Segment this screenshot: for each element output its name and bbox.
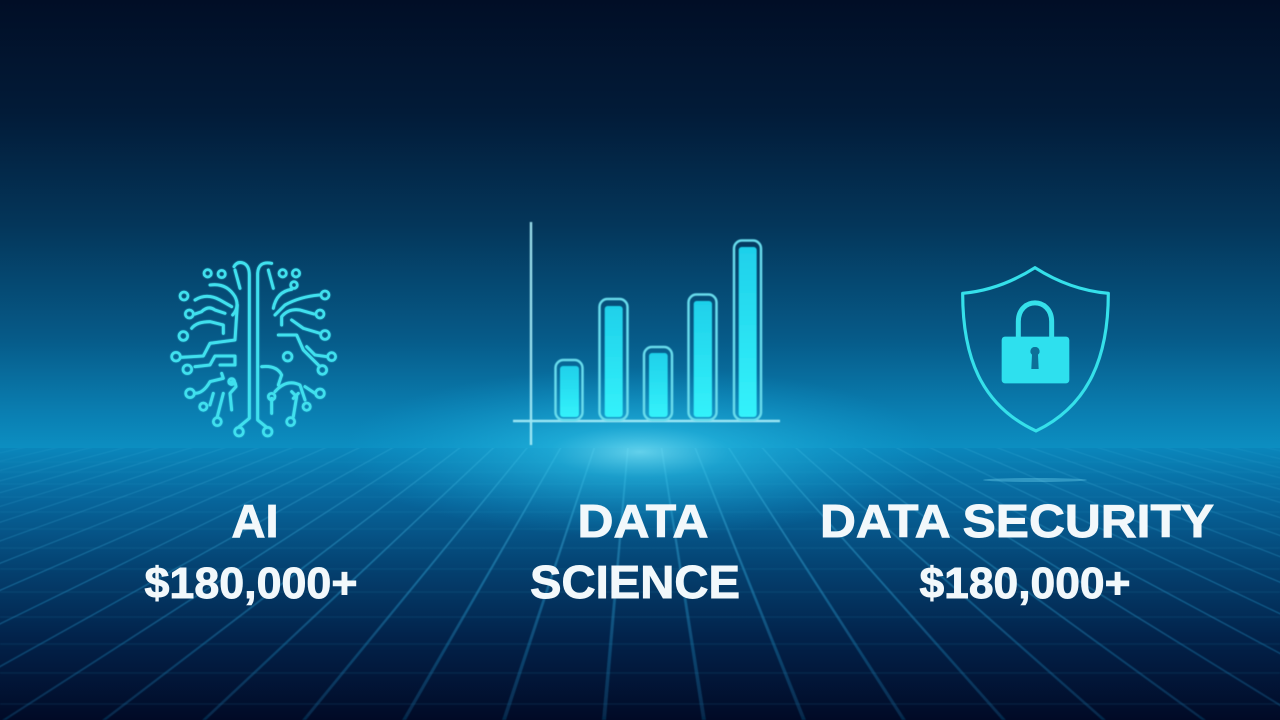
- background sky gradient: [0, 0, 1280, 450]
- icon: shield with padlock: [963, 268, 1108, 431]
- padlock shackle: [1018, 303, 1052, 338]
- label: Data Security: DATA SECURITY: [820, 495, 1214, 547]
- shield outline: [963, 268, 1108, 431]
- icon: bar chart: [513, 222, 780, 445]
- brain left hemisphere traces: [182, 285, 237, 417]
- brain nodes: [172, 270, 336, 436]
- perspective grid floor: [0, 448, 1280, 720]
- padlock body: [1002, 337, 1069, 383]
- floor gradient: [0, 448, 1280, 720]
- salary: Data Security: $180,000+: [920, 559, 1130, 608]
- bar 2: [600, 299, 628, 420]
- bar 3: [644, 347, 672, 420]
- brain central traces: [234, 263, 273, 427]
- light streak on floor: [983, 478, 1087, 482]
- salary: AI: $180,000+: [144, 559, 358, 608]
- label: Science: SCIENCE: [530, 556, 740, 608]
- icon: circuit brain: [172, 263, 336, 436]
- bar 4: [688, 294, 716, 420]
- central light glow on horizon: [340, 367, 940, 537]
- keyhole: [1030, 347, 1040, 369]
- bar 5: [734, 240, 761, 420]
- chart axes: [513, 222, 780, 445]
- bar 1: [556, 360, 582, 420]
- brain right hemisphere traces: [262, 289, 327, 417]
- label: AI: AI: [232, 495, 278, 547]
- label: Data: DATA: [578, 495, 708, 547]
